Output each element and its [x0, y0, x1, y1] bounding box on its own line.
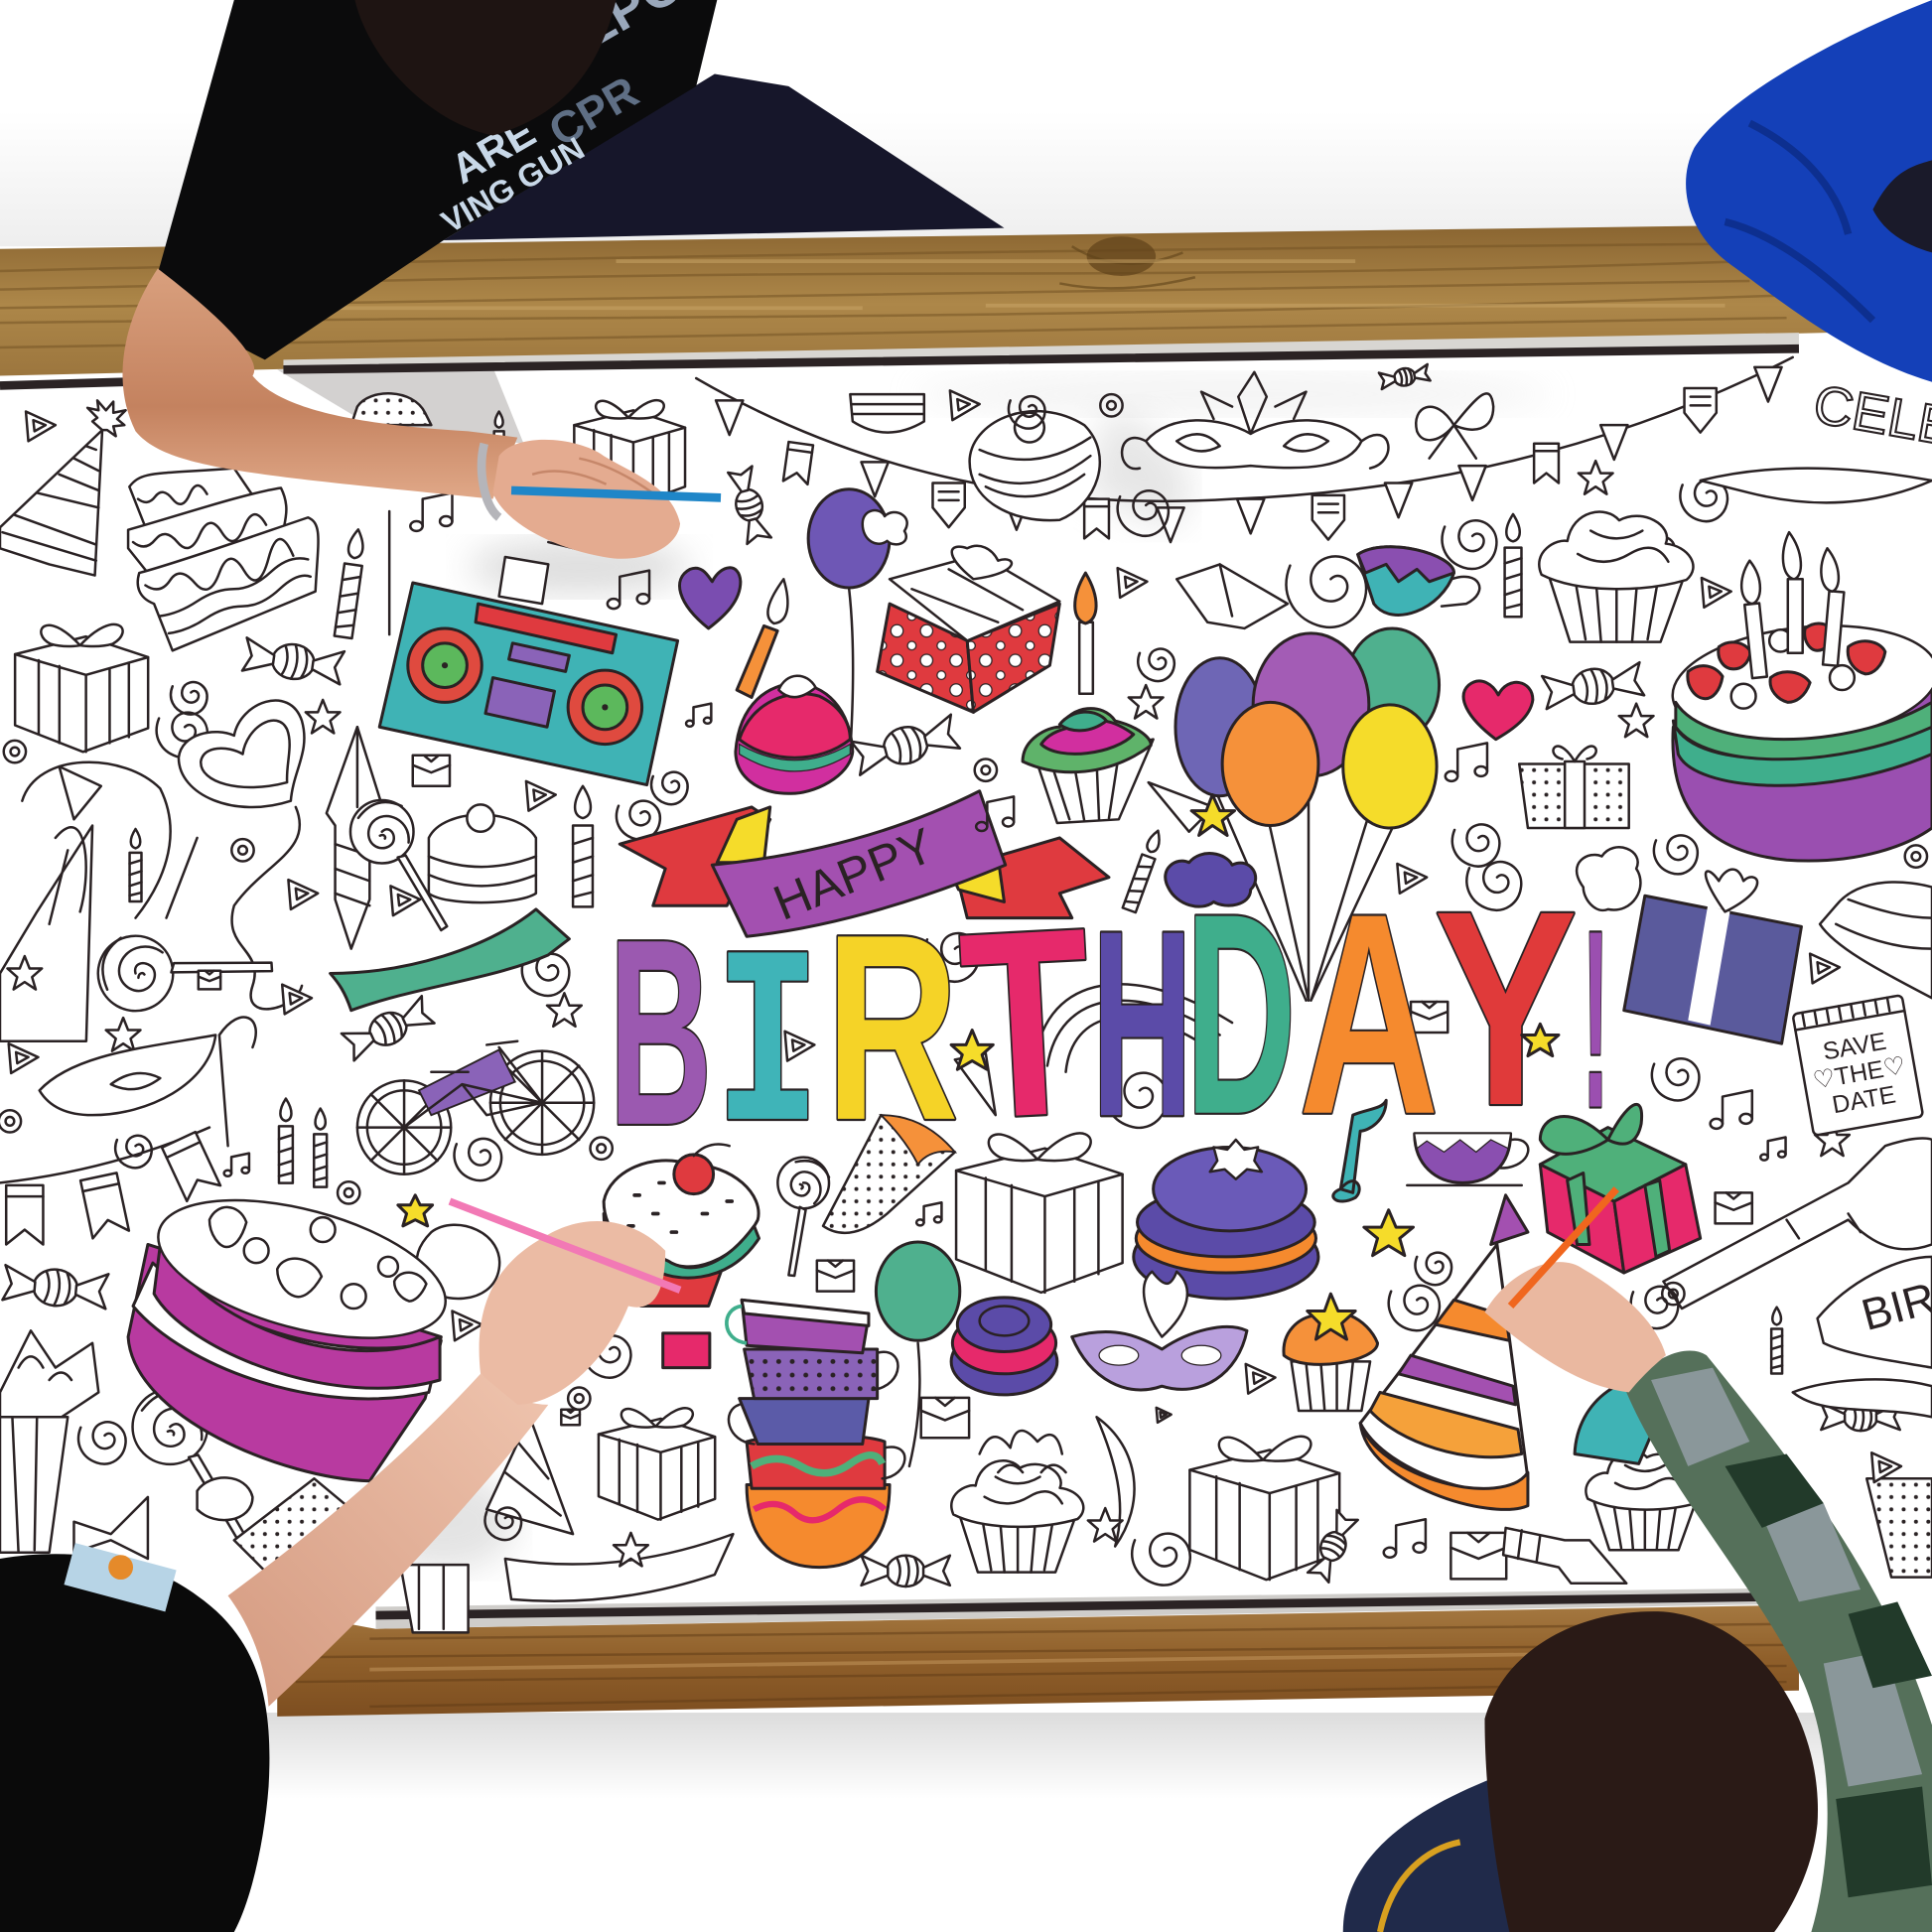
coloured: candle with orange flame [1075, 573, 1096, 694]
coloured: banner [620, 791, 1109, 936]
coloured: pink and green gift [1540, 1104, 1701, 1273]
coloured: purple macaron [1134, 1140, 1318, 1299]
coloured: orange candle [737, 579, 787, 697]
person: boy hoodie, hair and sleeve [1343, 1351, 1932, 1932]
coloured: yellow stars [398, 1024, 1559, 1256]
line art: upper centre doodles [785, 461, 1932, 1223]
coloured: cherry cupcake [604, 1144, 759, 1307]
shirt print: VING GUN [435, 130, 591, 240]
title: BIRTHDAY! lettering: I [715, 909, 821, 1195]
person: top-right blue hoodie [1686, 0, 1932, 382]
coloured: green and pink cupcake [1023, 709, 1154, 823]
shirt print: ARE [443, 108, 543, 193]
coloured: purple mask [1072, 1272, 1247, 1390]
coloured: navy gift [1624, 870, 1801, 1043]
coloured: music note teal [1333, 1100, 1386, 1201]
person: bottom-left arm and hand [228, 1201, 680, 1707]
line art: bottom-left flower cup and lollipop [0, 1330, 469, 1632]
title: BIRTHDAY! lettering [609, 854, 1609, 1195]
title: BIRTHDAY! lettering: Y [1435, 854, 1578, 1164]
person: bottom-left torso [0, 1543, 269, 1932]
person: top-left arm and hand [122, 269, 721, 559]
top bunting line art [696, 357, 1793, 542]
coloured: stacked cups [727, 1300, 904, 1568]
coloured: green balloon [876, 1242, 960, 1466]
title: BIRTHDAY! lettering: T [955, 872, 1098, 1174]
line art: bottom centre gifts, ribbon and ice cream [417, 1115, 1704, 1601]
line art: rainbow behind letters [924, 933, 1232, 1128]
coloured: purple balloon [808, 489, 907, 752]
coloured: boombox [379, 542, 678, 785]
paper poster sheet [0, 331, 1932, 1629]
title: BIRTHDAY! lettering: R [826, 879, 959, 1175]
coloured: purple cloud [1166, 854, 1256, 906]
save the date calendar [1793, 995, 1923, 1136]
save the date calendar: SAVE [1821, 1029, 1888, 1065]
text: HAPPY: HAPPY [765, 817, 941, 931]
shirt print: CPR [541, 68, 646, 157]
coloured: birthday cake right [1667, 532, 1932, 861]
text: ! [1583, 878, 1609, 1160]
line art: candles and bunting left [0, 1099, 630, 1378]
coloured: balloon cluster [1175, 628, 1440, 1001]
title: BIRTHDAY! lettering: D [1185, 855, 1297, 1174]
coloured: red small gift [663, 1333, 710, 1368]
title: BIRTHDAY! lettering: A [1299, 855, 1440, 1174]
save the date calendar: ♡THE♡ [1811, 1052, 1908, 1095]
coloured: cupcake teal under boy's arm [1575, 1376, 1676, 1463]
coloured: green ribbon [331, 909, 569, 1011]
line art: top-left hat and cakes [0, 393, 771, 758]
coloured: spiral roll [951, 1298, 1057, 1395]
line art: bicycle [357, 1041, 594, 1174]
coloured: pink heart [1463, 681, 1533, 740]
coloured: party hat [1360, 1195, 1528, 1509]
line art: carnival mask top [1118, 372, 1388, 536]
wooden table: bottom plank [277, 1601, 1799, 1717]
shirt print [435, 0, 723, 240]
coloured: teacup right [1407, 1134, 1528, 1185]
line art: right-hand side items [1631, 845, 1932, 1578]
coloured: teacup top [1358, 547, 1479, 615]
save the date calendar: DATE [1831, 1082, 1898, 1119]
person: boy hand and orange pen [1484, 1189, 1666, 1392]
wooden table: top plank [0, 225, 1932, 400]
line art: left column [0, 700, 711, 1180]
coloured: strawberry macaron [736, 676, 853, 793]
coloured: red polka-dot gift [878, 546, 1059, 712]
title: BIRTHDAY! lettering: H [1092, 875, 1192, 1172]
line art: top row icons [850, 364, 1493, 520]
title: BIRTHDAY! lettering: B [609, 884, 712, 1180]
person: top-left man torso [158, 0, 1004, 359]
coloured: paper plane with yellow star [1149, 782, 1235, 835]
coloured: purple heart [680, 568, 741, 628]
birthday hat with BIR text [1793, 1257, 1932, 1417]
coloured: left cake [128, 1173, 460, 1481]
coloured: orange cupcake [1284, 1294, 1378, 1411]
